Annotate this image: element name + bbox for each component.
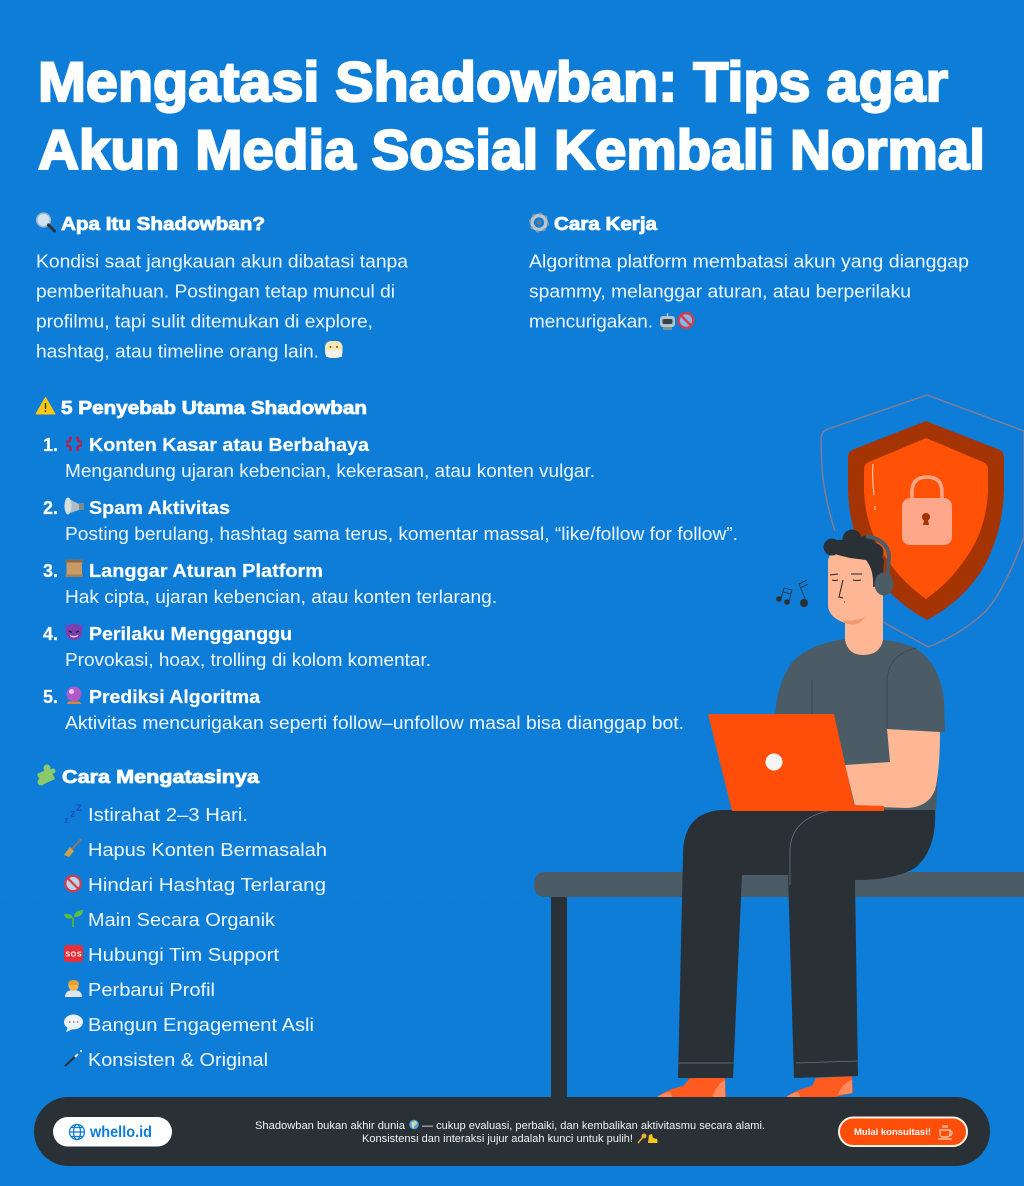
cta button: Mulai konsultasi!: [854, 1127, 931, 1138]
step: main organik: Main Secara Organik: [88, 910, 276, 930]
shield outline: [821, 395, 1024, 647]
list item 2: Posting berulang, hashtag sama terus, komentar massal, “like/follow for follow”.: [65, 524, 738, 544]
list item 4: [43, 622, 431, 670]
title: Mengatasi Shadowban: Tips agar: [38, 50, 948, 113]
text block: definition: hashtag, atau timeline orang lain.: [36, 342, 319, 362]
step: istirahat: [64, 800, 248, 825]
list item 5: 5.: [43, 686, 58, 707]
logo pill: [53, 1117, 172, 1146]
list item 4: Perilaku Mengganggu: [89, 623, 292, 644]
icon: gear: [530, 214, 548, 232]
step: istirahat: z: [70, 808, 76, 820]
step: perbarui profil: Perbarui Profil: [88, 980, 215, 1000]
icon: anger: [66, 436, 82, 451]
icon: music notes: [777, 580, 808, 606]
step: hapus konten: Hapus Konten Bermasalah: [88, 840, 327, 860]
icon: magnifier: [37, 213, 54, 231]
neck and face: [828, 550, 883, 655]
text block: definition: profilmu, tapi sulit ditemukan di explore,: [36, 312, 373, 332]
arm: [845, 729, 940, 808]
list item 3: 3.: [43, 560, 58, 581]
heading: cara kerja: Cara Kerja: [554, 213, 658, 234]
panel: cara kerja: [529, 213, 969, 332]
hair and headphones: [824, 530, 894, 596]
list item 1: Konten Kasar atau Berbahaya: [89, 434, 370, 455]
list item 4: 4.: [43, 623, 58, 644]
list item 1: 1.: [43, 434, 58, 455]
list item 2: [43, 497, 738, 544]
icon: coffee cup: [938, 1125, 952, 1139]
laptop: [708, 714, 884, 811]
icon: robot: [660, 313, 675, 330]
panel: apa itu shadowban: [36, 213, 409, 362]
step: bangun engagement: Bangun Engagement Asli: [88, 1015, 314, 1035]
list item 1: Mengandung ujaran kebencian, kekerasan, atau konten vulgar.: [65, 461, 595, 481]
text block: definition: Kondisi saat jangkauan akun dibatasi tanpa: [36, 252, 409, 272]
footer message: [255, 1120, 765, 1145]
heading: apa itu shadowban: Apa Itu Shadowban?: [61, 213, 265, 234]
step: istirahat: z: [76, 800, 82, 814]
list item 3: Langgar Aturan Platform: [89, 560, 323, 581]
legs: [678, 810, 935, 1078]
step: hubungi support: Hubungi Tim Support: [88, 945, 279, 965]
illustration: person with shield: [534, 395, 1024, 1098]
list item 4: Provokasi, hoax, trolling di kolom komentar.: [65, 650, 431, 670]
icon: megaphone: [64, 498, 84, 514]
icon: bandaged face: [325, 341, 342, 358]
text block: how it works: [529, 252, 969, 332]
text block: how it works: mencurigakan.: [529, 312, 653, 332]
heading: 5 penyebab: 5 Penyebab Utama Shadowban: [61, 397, 367, 418]
list item 5: [43, 686, 684, 733]
icon: globe: [70, 1124, 84, 1140]
text block: how it works: spammy, melanggar aturan, atau berperilaku: [529, 282, 911, 302]
step: hindari hashtag: Hindari Hashtag Terlarang: [88, 875, 326, 895]
list item 3: [43, 560, 497, 607]
footer message: Konsistensi dan interaksi jujur adalah kunci untuk pulih!: [362, 1133, 633, 1145]
step: istirahat: z: [64, 815, 69, 825]
list item 2: 2.: [43, 497, 58, 518]
icon: earth: [409, 1120, 419, 1129]
logo pill: whello.id: [89, 1124, 152, 1141]
icon: prohibited: [679, 313, 693, 328]
list item 5: Prediksi Algoritma: [89, 686, 261, 707]
bench: [534, 872, 1024, 1098]
footer message: Shadowban bukan akhir dunia: [255, 1120, 406, 1132]
icon: scroll: [66, 560, 83, 577]
title: [38, 50, 985, 181]
icon: warning: [36, 398, 55, 414]
list item 5: Aktivitas mencurigakan seperti follow–unfollow masal bisa dianggap bot.: [65, 713, 684, 733]
footer message: — cukup evaluasi, perbaiki, dan kembalikan aktivitasmu secara alami.: [422, 1120, 765, 1132]
icon: crystal ball: [66, 686, 82, 704]
panel: cara mengatasinya: [37, 764, 327, 1070]
text block: definition: pemberitahuan. Postingan tetap muncul di: [36, 282, 395, 302]
step: istirahat: Istirahat 2–3 Hari.: [88, 805, 248, 825]
text block: definition: [36, 252, 409, 362]
heading: cara mengatasinya: Cara Mengatasinya: [62, 766, 260, 787]
torso: [770, 639, 945, 812]
text block: how it works: Algoritma platform membatasi akun yang dianggap: [529, 252, 969, 272]
step: hubungi support: SOS: [66, 952, 82, 958]
icon: key and arm: [638, 1134, 658, 1143]
list item 3: Hak cipta, ujaran kebencian, atau konten terlarang.: [65, 587, 497, 607]
icon: shield with lock: [848, 421, 1004, 620]
list item 2: Spam Aktivitas: [89, 497, 230, 518]
title: Akun Media Sosial Kembali Normal: [38, 118, 985, 181]
footer bar: [34, 1097, 990, 1166]
icon: devil: [65, 622, 83, 640]
icon: puzzle: [37, 764, 56, 786]
list item 1: [43, 434, 595, 481]
cta button: [839, 1118, 967, 1146]
panel: 5 penyebab: [36, 397, 738, 733]
shoes: [656, 1076, 853, 1098]
step: konsisten: Konsisten & Original: [88, 1050, 268, 1070]
